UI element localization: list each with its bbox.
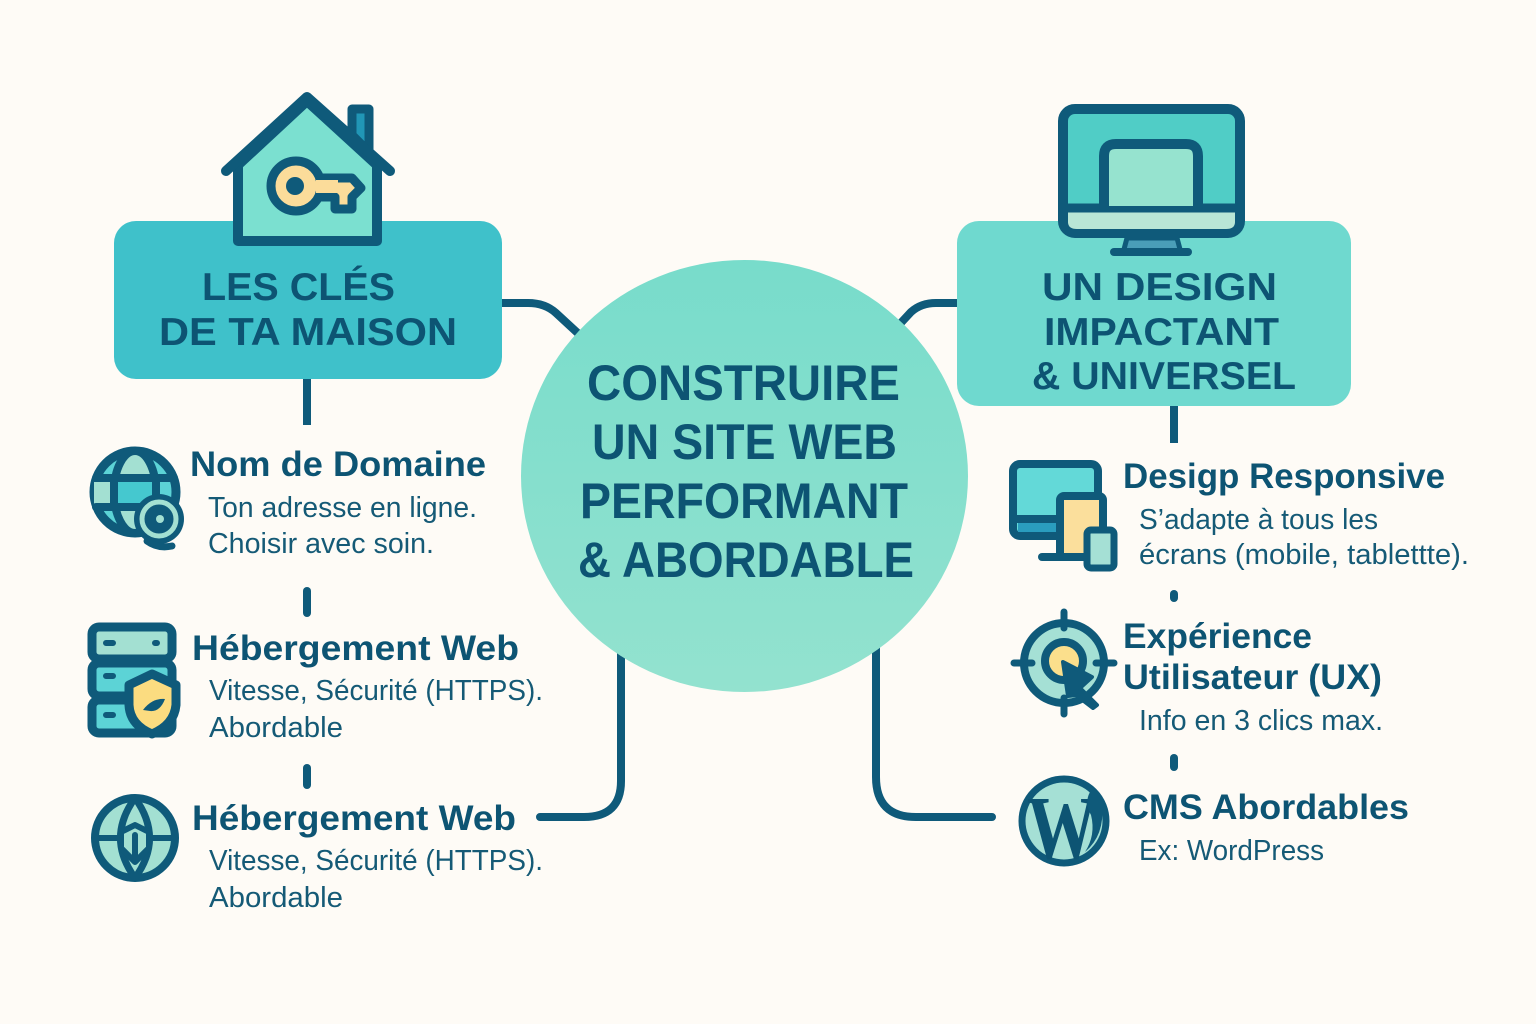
item description: Info en 3 clics max. bbox=[1139, 705, 1383, 737]
central title: & ABORDABLE bbox=[578, 532, 914, 588]
panel heading left: LES CLÉS bbox=[202, 265, 395, 309]
icon: responsive devices bbox=[1013, 464, 1114, 568]
item description: Ex: WordPress bbox=[1139, 835, 1324, 867]
item: hébergement web 1 bbox=[92, 627, 543, 744]
central title: CONSTRUIRE bbox=[587, 355, 900, 411]
item: cms abordables bbox=[1022, 779, 1409, 878]
item title bbox=[1123, 617, 1382, 697]
panel: les clés de ta maison bbox=[114, 221, 502, 379]
item description: Vitesse, Sécurité (HTTPS). bbox=[209, 675, 543, 707]
central title: UN SITE WEB bbox=[592, 414, 897, 470]
item title: Expérience bbox=[1123, 617, 1312, 656]
item description bbox=[1139, 504, 1469, 571]
icon: monitor bbox=[1063, 109, 1240, 253]
item description bbox=[209, 675, 543, 744]
item: design responsive bbox=[1013, 457, 1469, 571]
connector: right panel to centre bbox=[898, 303, 960, 326]
item: hébergement web 2 bbox=[95, 798, 543, 914]
item title: Utilisateur (UX) bbox=[1123, 658, 1382, 697]
item title: Desigp Responsive bbox=[1123, 457, 1445, 496]
connector: right branch dot bbox=[1170, 594, 1178, 598]
central title bbox=[578, 355, 914, 588]
icon: server with shield bbox=[92, 627, 176, 734]
icon: wordpress logo: W bbox=[1027, 779, 1097, 878]
central title: PERFORMANT bbox=[580, 473, 908, 529]
connector: right branch top bbox=[1170, 406, 1178, 443]
item description: Ton adresse en ligne. bbox=[208, 492, 477, 524]
connector: bottom-right item to centre bbox=[876, 640, 992, 817]
item: expérience utilisateur bbox=[1014, 612, 1383, 737]
item title: Hébergement Web bbox=[192, 799, 516, 838]
item description: S’adapte à tous les bbox=[1139, 504, 1378, 536]
item description bbox=[208, 492, 477, 560]
panel heading left bbox=[159, 265, 457, 354]
item description: Choisir avec soin. bbox=[208, 528, 434, 560]
icon: globe with at sign bbox=[94, 451, 184, 547]
panel heading right bbox=[1032, 266, 1296, 398]
item description bbox=[209, 845, 543, 914]
item description: Vitesse, Sécurité (HTTPS). bbox=[209, 845, 543, 877]
item description: Abordable bbox=[209, 712, 343, 744]
connector: left panel to centre bbox=[500, 303, 582, 337]
connector: left branch top bbox=[303, 379, 311, 425]
item description: écrans (mobile, tablettte). bbox=[1139, 539, 1469, 571]
connector: bottom-left item to centre bbox=[540, 645, 621, 817]
connector: left branch dash lower bbox=[303, 768, 311, 785]
panel heading left: DE TA MAISON bbox=[159, 311, 457, 354]
panel heading right: IMPACTANT bbox=[1044, 311, 1279, 354]
panel: un design impactant bbox=[957, 221, 1351, 406]
central circle bbox=[521, 260, 968, 692]
connector: right branch dash bbox=[1170, 758, 1178, 767]
icon: target with cursor bbox=[1014, 612, 1114, 714]
item: nom de domaine bbox=[94, 445, 486, 560]
item title: CMS Abordables bbox=[1123, 788, 1409, 827]
item description: Abordable bbox=[209, 882, 343, 914]
item title: Nom de Domaine bbox=[190, 445, 486, 484]
item title: Hébergement Web bbox=[192, 629, 519, 668]
panel heading right: UN DESIGN bbox=[1042, 266, 1277, 309]
icon: house with key bbox=[226, 97, 390, 241]
icon: globe with leaf bbox=[95, 798, 175, 878]
connector: left branch dash bbox=[303, 591, 311, 613]
panel heading right: & UNIVERSEL bbox=[1032, 355, 1296, 398]
